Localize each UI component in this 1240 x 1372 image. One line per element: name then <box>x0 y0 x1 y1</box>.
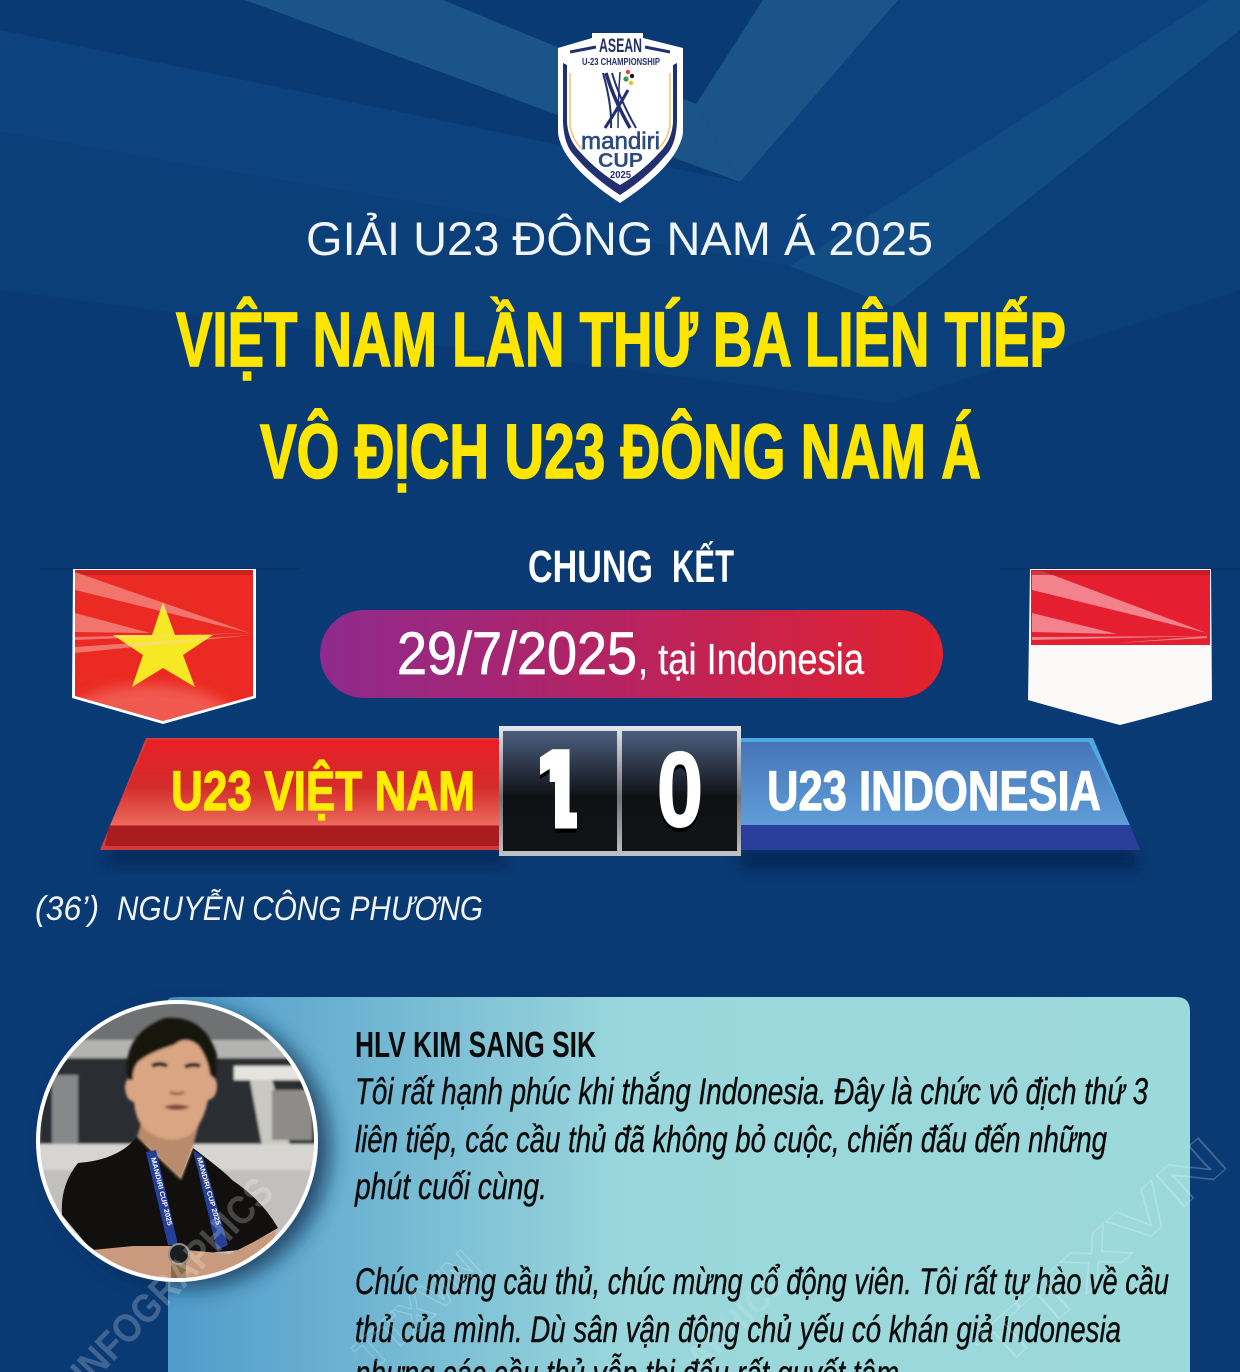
logo: ASEAN U-23 Championship Mandiri Cup 2025 <box>558 33 683 203</box>
heading: final: KẾT <box>672 541 734 592</box>
scoreboard 1 - 0: 0 <box>657 735 703 853</box>
heading: final: CHUNG <box>528 541 653 592</box>
lanyard: MANDIRI CUP 2025 <box>195 1157 221 1226</box>
logo: ASEAN U-23 Championship Mandiri Cup 2025: CUP <box>598 150 643 172</box>
score bar: U23 Việt Nam: U23 VIỆT NAM <box>171 759 475 822</box>
quote author: HLV KIM SANG SIK <box>355 1024 596 1065</box>
date pill: , tại Indonesia <box>638 635 864 684</box>
date pill <box>320 610 943 698</box>
coach photo <box>30 1000 330 1292</box>
date pill: 29/7/2025 <box>397 620 637 687</box>
logo: ASEAN U-23 Championship Mandiri Cup 2025: 2025 <box>610 169 631 181</box>
scoreboard 1 - 0: 1 <box>527 732 587 853</box>
logo: ASEAN U-23 Championship Mandiri Cup 2025: mandiri <box>581 128 660 155</box>
subtitle: GIẢI U23 ĐÔNG NAM Á 2025 <box>306 212 933 265</box>
score bar: U23 Indonesia <box>736 738 1140 868</box>
panel: coach quote <box>168 997 1190 1372</box>
trophy <box>603 72 636 128</box>
logo: ASEAN U-23 Championship Mandiri Cup 2025: U-23 CHAMPIONSHIP <box>582 56 660 68</box>
flag: Indonesia <box>1000 569 1240 725</box>
watermarks <box>63 1124 1239 1372</box>
lanyard <box>146 1150 228 1250</box>
quote text <box>354 1071 1169 1372</box>
score bar: U23 Việt Nam <box>100 738 505 864</box>
quote text: phút cuối cùng. <box>354 1166 547 1207</box>
scoreboard 1 - 0: 1 <box>527 728 587 849</box>
goal scorer: (36’) <box>35 890 99 928</box>
crossed arms <box>94 1230 277 1278</box>
star <box>113 602 213 687</box>
title: VÔ ĐỊCH U23 ĐÔNG NAM Á <box>260 408 981 495</box>
scoreboard 1 - 0 <box>499 726 741 856</box>
goal scorer: NGUYỄN CÔNG PHƯƠNG <box>117 890 483 928</box>
score bar: U23 Indonesia: U23 INDONESIA <box>767 759 1101 822</box>
scoreboard 1 - 0: 0 <box>657 731 703 849</box>
flag: Vietnam <box>40 568 300 724</box>
title <box>176 296 1066 495</box>
lanyard: MANDIRI CUP 2025 <box>149 1157 173 1227</box>
logo: ASEAN U-23 Championship Mandiri Cup 2025: ASEAN <box>599 36 642 57</box>
coach shirt <box>62 1137 278 1260</box>
coach neck and head <box>125 1018 217 1180</box>
